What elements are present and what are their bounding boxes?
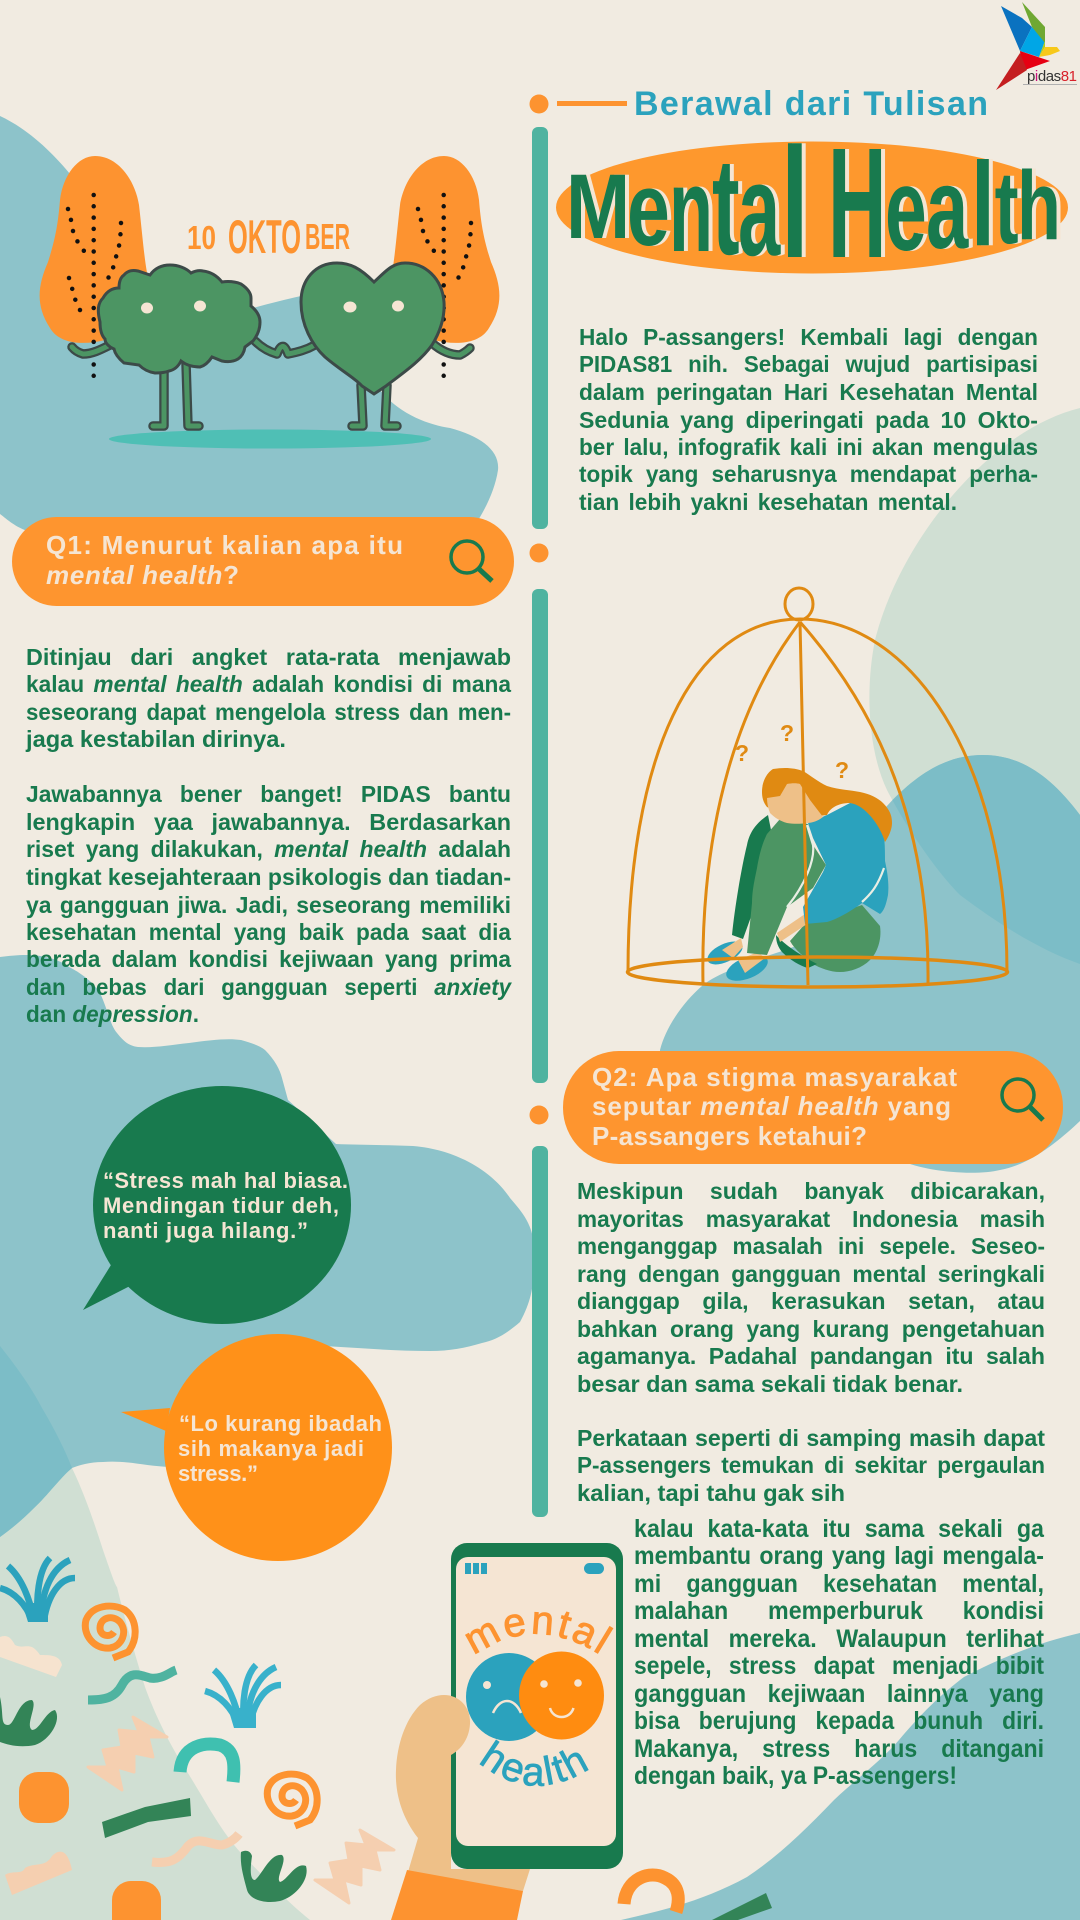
limbs fill <box>72 341 470 426</box>
speech bubble: orange: sih makanya jadi <box>178 1436 364 1461</box>
continuation text: Makanya, stress harus ditangani <box>634 1735 1044 1763</box>
illustration: phone in hand: health <box>480 1740 589 1786</box>
title: Mental Health: H <box>828 116 886 291</box>
answer text Q2: rang dengan gangguan mental seringkali <box>577 1261 1045 1287</box>
title: Mental Health: h <box>1017 153 1061 261</box>
title: Mental Health: e <box>889 144 931 275</box>
intro text: Sedunia yang diperingati pada 10 Okto- <box>579 407 1038 433</box>
illustration: phone in hand <box>391 1543 623 1920</box>
continuation text <box>634 1515 1045 1790</box>
shape: teal arch <box>180 1744 234 1782</box>
answer text Q1: lengkapin yaa jawabannya. Berdasarkan <box>26 809 511 835</box>
icon: spiral 2 <box>267 1774 317 1826</box>
icon: spiral 1 <box>85 1606 135 1658</box>
date label: 10 <box>187 219 216 256</box>
title: Mental Health <box>556 115 1068 291</box>
intro text: dalam peringatan Hari Kesehatan Mental <box>579 379 1038 405</box>
icon: plant 1 <box>0 1558 75 1622</box>
speech bubble: green: “Stress mah hal biasa. <box>103 1168 348 1193</box>
answer text Q1: seseorang dapat mengelola stress dan men- <box>26 699 511 725</box>
answer text Q2: Perkataan seperti di samping masih dapat <box>577 1425 1045 1451</box>
date label: BER <box>305 216 350 257</box>
answer text Q1: Ditinjau dari angket rata-rata menjawab <box>26 644 511 670</box>
title: Mental Health: n <box>673 142 717 276</box>
answer text Q2: kalian, tapi tahu gak sih <box>577 1480 845 1506</box>
answer text Q2: menganggap masalah ini sepele. Seseo- <box>577 1233 1045 1259</box>
continuation text: gangguan kejiwaan lainnya yang <box>634 1680 1044 1708</box>
title: Mental Health: l <box>971 137 995 270</box>
title: Mental Health: t <box>995 150 1019 265</box>
shape: orange arch <box>624 1875 678 1912</box>
icon: left tree <box>40 156 150 343</box>
continuation text: sepele, stress dapat menjadi bibit <box>634 1652 1045 1680</box>
icon: brain character <box>98 265 260 373</box>
shape: peach zigzag <box>88 1717 167 1790</box>
intro text: tian lebih yakni kesehatan mental. <box>579 489 957 515</box>
answer text Q1 <box>25 644 512 1027</box>
title: Mental Health: l <box>975 137 999 270</box>
intro text: PIDAS81 nih. Sebagai wujud partisipasi <box>579 351 1038 377</box>
intro text: Halo P-assangers! Kembali lagi dengan <box>579 324 1038 350</box>
shape: green plant 2 <box>241 1851 307 1902</box>
speech bubble: orange: stress.” <box>178 1461 258 1486</box>
continuation text: kalau kata-kata itu sama sekali ga <box>634 1515 1045 1543</box>
answer text Q1: tingkat kesejahteraan psikologis dan tiadan- <box>26 864 511 890</box>
title: Mental Health: H <box>832 116 890 291</box>
answer text Q2: bahkan orang yang kurang pengetahuan <box>577 1316 1045 1342</box>
heading line <box>557 101 627 106</box>
title: Mental Health: a <box>738 136 781 283</box>
shape: peach squiggle <box>152 1834 239 1862</box>
continuation text: dengan baik, ya P-assengers! <box>634 1762 957 1790</box>
title: Mental Health: M <box>570 154 634 258</box>
question marks: ? <box>735 740 749 766</box>
doodles: bottom-left shapes <box>0 1558 772 1920</box>
answer text Q1: jaga kestabilan dirinya. <box>25 726 286 752</box>
answer text Q2: agamanya. Padahal pandangan itu salah <box>577 1343 1045 1369</box>
question marks: ? <box>835 757 849 783</box>
answer text Q2: P-assengers temukan di sekitar pergaulan <box>577 1452 1045 1478</box>
icon: magnifier <box>451 541 492 581</box>
shape: peach wave <box>5 1852 72 1895</box>
icon: plant 2 <box>205 1665 281 1728</box>
speech bubble: green <box>83 1086 351 1324</box>
phone screen <box>456 1557 616 1846</box>
shape: teal squiggle <box>88 1670 176 1700</box>
answer text Q2 <box>577 1178 1045 1506</box>
continuation text: mental mereka. Walaupun terlihat <box>634 1625 1045 1653</box>
title: Mental Health: l <box>781 115 809 290</box>
panel: Q1 pill: Q1: Menurut kalian apa itu <box>46 530 403 560</box>
answer text Q1: dan depression. <box>26 1001 199 1027</box>
phone body <box>451 1543 623 1869</box>
title: Mental Health: h <box>1021 153 1065 261</box>
answer text Q1: riset yang dilakukan, mental health adalah <box>26 836 511 862</box>
answer text Q2: dianggap gila, kerasukan setan, atau <box>577 1288 1045 1314</box>
question marks <box>735 720 849 783</box>
title: Mental Health: a <box>926 144 969 273</box>
center timeline <box>530 94 548 1517</box>
icon: heart character <box>301 263 444 394</box>
ground shadow <box>109 430 431 448</box>
panel: Q1 pill: mental health? <box>46 560 239 590</box>
answer text Q1: kalau mental health adalah kondisi di mana <box>26 671 511 697</box>
answer text Q1: berada dalam kondisi kejiwaan yang prima <box>26 946 511 972</box>
shape: green plant <box>0 1697 57 1746</box>
title: Mental Health: t <box>712 130 740 284</box>
title: Mental Health: M <box>566 154 630 258</box>
speech bubble: green: Mendingan tidur deh, <box>103 1193 339 1218</box>
continuation text: membantu orang yang lagi mengala- <box>634 1542 1044 1570</box>
logo: pidas81 <box>996 2 1077 90</box>
title: Mental Health: e <box>631 150 674 268</box>
continuation text: malahan memperburuk kondisi <box>634 1597 1044 1625</box>
answer text Q1: ya gangguan jiwa. Jadi, seseorang memiliki <box>26 892 511 918</box>
panel: Q2 pill: seputar mental health yang <box>592 1091 951 1121</box>
date label <box>187 210 350 263</box>
cage <box>628 588 1008 987</box>
title: Mental Health: n <box>669 142 713 276</box>
subtitle: Berawal dari Tulisan: Berawal dari Tulisan <box>634 85 988 123</box>
illustration: phone in hand: mental <box>465 1612 614 1654</box>
intro text: topik yang seharusnya mendapat perha- <box>579 461 1038 487</box>
answer text Q2: mayoritas masyarakat Indonesia masih <box>577 1206 1045 1232</box>
title: Mental Health: t <box>716 130 744 284</box>
intro text <box>579 324 1038 515</box>
icon: happy face <box>519 1652 604 1740</box>
panel: Q1 pill <box>12 517 514 606</box>
woman figure <box>704 768 892 986</box>
logo: pidas81: pidas81 <box>1027 68 1077 85</box>
title: Mental Health: a <box>742 136 785 283</box>
panel: Q2 pill <box>563 1051 1063 1164</box>
tree dots <box>68 195 471 380</box>
continuation text: bisa berujung kepada bunuh diri. <box>634 1707 1044 1735</box>
eyes <box>141 300 404 314</box>
shape: orange squares <box>19 1772 161 1920</box>
speech bubble: orange <box>121 1334 392 1561</box>
title: Mental Health: e <box>627 150 670 268</box>
panel: Q2 pill: P-assangers ketahui? <box>592 1121 867 1151</box>
icon: magnifier <box>1002 1079 1043 1120</box>
intro text: ber lalu, infografik kali ini akan mengulas <box>579 434 1038 460</box>
speech bubble: orange: “Lo kurang ibadah <box>179 1411 382 1436</box>
illustration: woman in cage <box>628 588 1008 987</box>
question marks: ? <box>780 720 794 746</box>
title: Mental Health: a <box>930 144 973 273</box>
shape: green sticks <box>102 1798 772 1920</box>
panel: Q2 pill: Q2: Apa stigma masyarakat <box>592 1062 957 1092</box>
icon: right tree <box>389 156 499 343</box>
date label: OKTO <box>228 210 301 263</box>
hand <box>396 1695 530 1891</box>
illustration: brain and heart holding hands <box>40 156 499 448</box>
icon: sad face <box>466 1653 552 1741</box>
answer text Q1: Jawabannya bener banget! PIDAS bantu <box>26 781 511 807</box>
continuation text: mi gangguan kesehatan mental, <box>634 1570 1044 1598</box>
word: mental <box>474 1634 602 1656</box>
answer text Q1: kesehatan mental yang baik pada saat dia <box>26 919 511 945</box>
shape: cream wave <box>0 1636 62 1677</box>
shape: peach zigzag 2 <box>315 1830 394 1903</box>
answer text Q2: Meskipun sudah banyak dibicarakan, <box>577 1178 1045 1204</box>
title: Mental Health: e <box>885 144 927 275</box>
title: Mental Health: l <box>785 115 813 290</box>
title: Mental Health: t <box>999 150 1023 265</box>
status icons <box>465 1563 604 1574</box>
sleeve <box>391 1870 523 1920</box>
limbs outline <box>72 341 470 426</box>
speech bubble: green: nanti juga hilang.” <box>103 1218 308 1243</box>
answer text Q1: dan bebas dari gangguan seperti anxiety <box>26 974 512 1000</box>
answer text Q2: besar dan sama sekali tidak benar. <box>577 1371 963 1397</box>
word: health <box>478 1760 602 1786</box>
